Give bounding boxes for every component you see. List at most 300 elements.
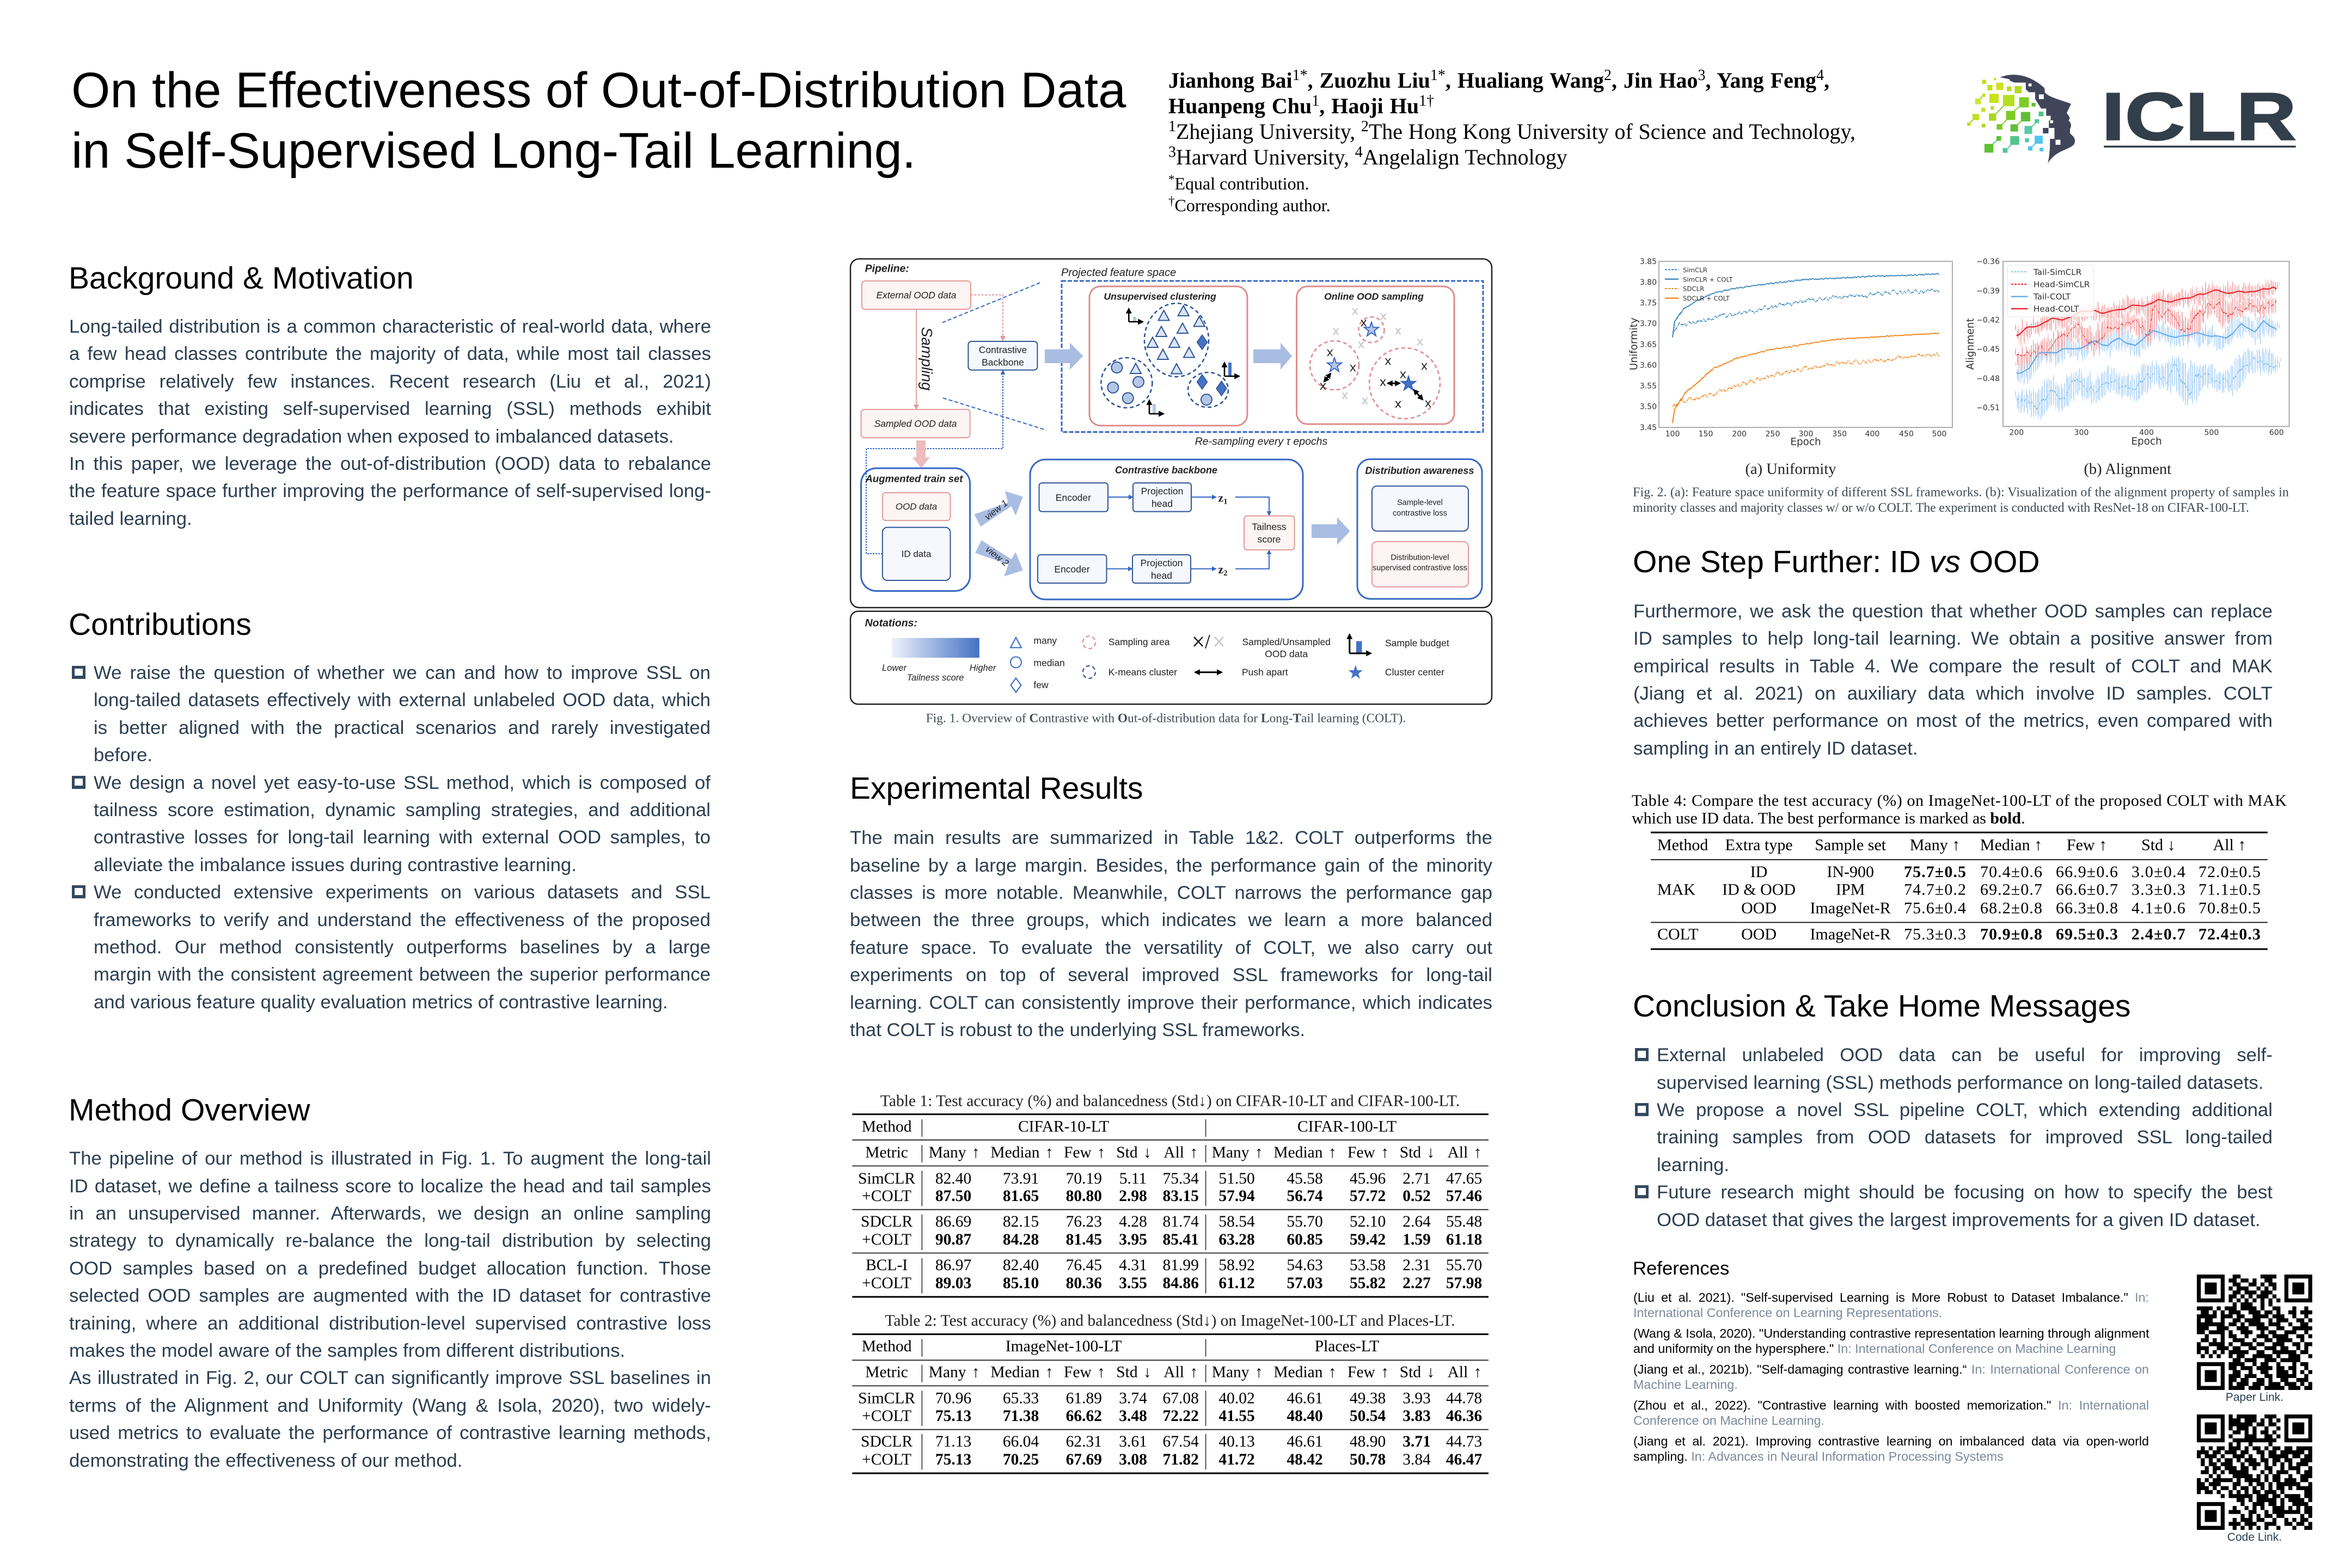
icon: bullet 2 [72,775,85,788]
reference 1: (Liu et al. 2021). "Self-supervised Learning is More Robust to Dataset Imbalance." In: [1633,1290,2149,1304]
panel: online OOD sampling: Online OOD sampling [1324,291,1424,302]
row: OOD: 75.6±0.4 [1904,899,1966,917]
header: Few ↑ [2067,836,2107,854]
y ticks: 3.60 [1640,362,1657,370]
text block: experimental results: learning. COLT can consistently improve their performance, which indicates [850,993,1492,1013]
table 2: +COLT [862,1407,911,1425]
table 1: 89.03 [935,1275,971,1292]
rows: 3.93 [1402,1389,1431,1407]
table 2: 66.62 [1066,1407,1102,1425]
icon: conclusion bullet 3 [1635,1185,1649,1198]
text block: conclusion list: OOD dataset that gives the largest improvements for a given ID dataset. [1657,1210,2261,1230]
authors and affiliations: 3Harvard University, 4Angelalign Technology [1168,144,1567,169]
authors and affiliations: Jianhong Bai1*, Zuozhu Liu1*, Hualiang Wang2, Jin Hao3, Yang Feng4, [1168,67,1829,93]
panel: contrastive backbone: Encoder [1054,564,1090,575]
caption: figure 2 [1633,486,2289,515]
panel: distribution awareness [1357,459,1482,599]
table 2: SDCLR [861,1433,912,1450]
row: ID: ID [1750,863,1767,881]
panel: unsupervised clustering: Unsupervised clustering [1104,291,1216,302]
legend: cluster center: Cluster center [1385,667,1444,678]
x ticks: 250 [1766,430,1780,439]
reference 3 [1633,1362,2149,1392]
subcaptions: figure 2: (b) Alignment [2084,461,2171,478]
table 2: 3.71 [1402,1433,1431,1450]
table 1: 1.59 [1402,1231,1431,1248]
table 1: 3.55 [1119,1275,1147,1292]
reference 4: (Zhou et al., 2022). "Contrastive learning with boosted memorization." In: International [1633,1398,2149,1412]
metric row: All ↑ [1163,1363,1198,1381]
icon: bullet 3 [72,885,85,898]
y ticks: −0.45 [1976,345,2000,354]
x ticks: 200 [2009,428,2024,437]
table 1: 76.23 [1066,1213,1102,1230]
table 1: 2.98 [1119,1187,1147,1205]
legend: shapes: few [1033,679,1049,690]
row: ID and OOD: 71.1±0.5 [2198,880,2261,898]
row: COLT [1657,926,2261,944]
caption: Table 1: Test accuracy (%) and balancedness (Std↓) on CIFAR-10-LT and CIFAR-100-LT. [880,1092,1460,1110]
reference 5: sampling. In: Advances in Neural Information Processing Systems [1633,1449,2004,1463]
table 1 [852,1092,1489,1297]
table 1: 57.94 [1218,1187,1255,1205]
arrow: view 1 [974,491,1023,526]
table 1: 55.48 [1446,1213,1482,1230]
row: OOD: 4.1±0.6 [2132,899,2185,917]
panel: augmented train set: Augmented train set [865,473,963,485]
text block: method overview: makes the model aware of the samples from different distributions. [69,1340,625,1361]
rows: 44.78 [1446,1389,1482,1407]
row: ID and OOD: IPM [1836,880,1865,898]
table 1: 57.46 [1446,1187,1482,1205]
legend: sampled marks [1194,635,1331,659]
legend: shapes [1010,635,1065,693]
text block: contributions list: contrastive losses for long-tail learning with external OOD samples, to [94,827,710,848]
row: OOD: ImageNet-R [1810,899,1891,917]
text block: contributions list: alleviate the imbalance issues during contrastive learning. [94,855,577,875]
text block: contributions list: frameworks to verify and understand the effectiveness of the proposed [94,910,710,930]
reference 3: (Jiang et al., 2021b). "Self-damaging contrastive learning.“ In: International Conference on [1633,1362,2149,1376]
rows [858,1389,1482,1407]
heading: Background & Motivation: Background & Motivation [69,261,414,296]
x ticks: 300 [1799,430,1813,439]
y ticks: 3.70 [1640,320,1657,328]
table 2: 46.36 [1446,1407,1482,1425]
y ticks: 3.80 [1640,278,1657,287]
table 1: 57.98 [1446,1275,1482,1292]
text block: contributions list: margin with the consistent agreement between the superior performance [94,964,710,985]
table 2: +COLT [862,1451,911,1468]
table 1: 59.42 [1350,1231,1386,1248]
rows: SimCLR [858,1389,915,1407]
text block: method overview [69,1148,711,1471]
legend: SDCLR + COLT [1683,295,1730,302]
caption: Table 4: Compare the test accuracy (%) on ImageNet-100-LT of the proposed COLT with MAK [1632,792,2287,810]
row: COLT: OOD [1741,926,1777,944]
title: in Self-Supervised Long-Tail Learning. [71,123,916,179]
rows: 45.58 [1287,1170,1323,1187]
icon: conclusion bullet 2 [1635,1103,1649,1116]
header: Method [862,1118,912,1136]
table 1: 61.12 [1218,1275,1255,1292]
reference 5: (Jiang et al. 2021). Improving contrastive learning on imbalanced data via open-world [1633,1434,2149,1448]
x ticks: 350 [1832,430,1847,439]
table 1: 2.27 [1402,1275,1431,1292]
rows: 5.11 [1119,1170,1147,1187]
panel: augmented train set [861,468,970,591]
metric row: Few ↑ [1347,1363,1389,1381]
reference 4: Conference on Machine Learning. [1633,1413,1824,1428]
x ticks [1665,430,1946,439]
panel: contrastive backbone: z [1218,562,1223,576]
rows: 49.38 [1350,1389,1386,1407]
text block: conclusion list: supervised learning (SSL) methods performance on long-tailed datasets. [1657,1073,2263,1093]
table 2: 48.40 [1287,1407,1323,1425]
arrow: clustering to sampling [1253,342,1292,370]
row: ID and OOD: ID & OOD [1722,880,1796,898]
table 2: 71.38 [1003,1407,1039,1425]
arrow: sampled to train set [912,440,930,468]
chart: uniformity [1628,258,1952,448]
legend: shapes: many [1033,635,1057,646]
text block: contributions list: tailness score estimation, dynamic sampling strategies, and additional [94,800,710,820]
metric row: Few ↑ [1064,1363,1105,1381]
axis labels: Alignment [1965,318,1976,370]
text block: method overview: OOD samples based on a predefined budget allocation function. Those [69,1258,711,1279]
text block: method overview: used metrics to evaluate the performance of contrastive learning methods, [69,1423,711,1443]
legend: areas: K-means cluster [1108,667,1177,678]
row: COLT: 72.4±0.3 [2198,926,2261,944]
x ticks: 100 [1665,430,1680,439]
table 1: 58.92 [1218,1257,1255,1274]
table 2: 3.48 [1119,1407,1147,1425]
panel: contrastive backbone: Contrastive backbone [1115,464,1217,475]
table 1: 63.28 [1218,1231,1255,1248]
table 2 [852,1312,1489,1473]
reference 2 [1633,1326,2149,1356]
curves [1673,274,1939,423]
x ticks [2009,428,2284,437]
label: code link: Code Link. [2227,1531,2282,1543]
text block: background: comprise relatively few instances. Recent research (Liu et al., 2021) [69,371,711,392]
author notes [1168,173,1331,215]
table 1: 86.69 [935,1213,971,1230]
arrow: view 2: view 2 [984,544,1011,568]
axis labels [1628,317,1821,448]
reference 3: Machine Learning. [1633,1377,1738,1392]
axis labels [1965,318,2162,448]
text block: experimental results: baseline by a large margin. Besides, the performance gain of the minority [850,855,1492,876]
legend [2007,265,2094,317]
metric row [865,1144,1481,1161]
table 2: 46.47 [1446,1451,1482,1468]
text block: method overview: demonstrating the effectiveness of our method. [69,1450,462,1471]
table 4 [1632,792,2287,949]
legend: Tail-SimCLR [2033,267,2082,277]
row: COLT: COLT [1657,926,1699,944]
metric row: Median ↑ [990,1363,1054,1381]
text block: one step further: sampling in an entirely ID dataset. [1633,738,1918,759]
table 1: 83.15 [1163,1187,1199,1205]
table 1: BCL-I [866,1257,908,1274]
table 1: 84.86 [1163,1275,1199,1292]
icon: paper QR code [2197,1275,2312,1390]
panel: contrastive backbone: z [1218,491,1223,505]
text block: method overview: selected OOD samples are augmented with the ID dataset for contrastive [69,1285,711,1306]
legend: sampled marks: Sampled/Unsampled [1242,636,1331,647]
text block: contributions list: method. Our method consistently outperforms baselines by a large [94,937,710,958]
authors and affiliations: 1Zhejiang University, 2The Hong Kong University of Science and Technology, [1168,118,1855,144]
metric row: Std ↓ [1116,1363,1152,1381]
rows: 40.02 [1218,1389,1255,1407]
figure 1: notations panel: Notations: [865,617,917,629]
table 2: 3.84 [1402,1451,1431,1468]
table 1: 80.80 [1066,1187,1102,1205]
box: external OOD data [862,281,971,309]
row: OOD: 66.3±0.8 [2056,899,2118,917]
x ticks: 500 [2204,428,2219,437]
table 1: 55.70 [1446,1257,1482,1274]
x ticks: 400 [1865,430,1879,439]
header: Many ↑ [1910,836,1960,854]
rows: 46.61 [1287,1389,1323,1407]
text block: experimental results: between the three groups, which indicates we learn a more balanced [850,910,1492,930]
icon: code QR code [2197,1414,2312,1530]
heading: Method Overview: Method Overview [69,1092,310,1127]
panel: contrastive backbone: Projection [1141,558,1183,568]
box: sampled OOD data: Sampled OOD data [874,418,957,429]
table 2: 71.82 [1163,1451,1199,1468]
legend: tailness gradient: Tailness score [907,673,964,683]
legend: Tail-COLT [2033,292,2071,302]
table 1: 3.95 [1119,1231,1147,1248]
table 2: 75.13 [935,1451,971,1468]
text block: contributions list: We raise the question of whether we can and how to improve SSL on [94,663,710,683]
metric row [865,1363,1481,1381]
legend: sample budget: Sample budget [1385,638,1449,648]
table 1: 61.18 [1446,1231,1482,1248]
box: contrastive backbone: Contrastive [979,344,1027,355]
label: pipeline: Pipeline: [865,263,909,275]
caption [1632,792,2287,828]
panel: online OOD sampling [1297,286,1454,424]
table 1: 85.10 [1003,1275,1039,1292]
x ticks: 400 [2139,428,2154,437]
rows: 2.71 [1402,1170,1431,1187]
rows: 61.89 [1066,1389,1102,1407]
row: ID and OOD [1657,880,2261,898]
table 1: 81.74 [1163,1213,1199,1230]
table 1: 80.36 [1066,1275,1102,1292]
icon: head and pixels [1967,75,2075,163]
table 1: 57.72 [1350,1187,1386,1205]
y ticks: 3.65 [1640,341,1657,350]
dashed feature space box [1062,281,1483,432]
row: ID and OOD: MAK [1657,880,1695,898]
rows: 65.33 [1003,1389,1039,1407]
subcaptions: figure 2: (a) Uniformity [1745,461,1836,478]
table 2: 46.61 [1287,1433,1323,1450]
metric row: All ↑ [1448,1363,1481,1381]
heading: References: References [1633,1258,1729,1278]
logo: ICLR [1967,75,2296,163]
header: Median ↑ [1980,836,2042,854]
panel: distribution awareness: contrastive loss [1393,509,1447,518]
panel: augmented train set: ID data [902,549,932,559]
legend: push apart: Push apart [1242,667,1288,678]
header: Std ↓ [2141,836,2176,854]
legend: Head-SimCLR [2033,280,2090,290]
table 2: 72.22 [1163,1407,1199,1425]
heading: Contributions: Contributions [69,607,252,641]
figure 1: notations panel [850,611,1492,704]
x ticks: 150 [1699,430,1713,439]
text block: background: tailed learning. [69,509,192,529]
legend: sample budget [1350,634,1449,653]
table 2: 62.31 [1066,1433,1102,1450]
text block: conclusion list: training samples from OOD datasets for improved SSL long-tailed [1657,1127,2273,1148]
row: ID and OOD: 66.6±0.7 [2056,880,2118,898]
text block: conclusion list [1657,1045,2273,1230]
text block: method overview: As illustrated in Fig. 2, our COLT can significantly improve SSL baselines in [69,1368,711,1388]
row: OOD: 70.8±0.5 [2198,899,2261,917]
text block: method overview: in an unsupervised manner. Afterwards, we design an online sampling [69,1203,711,1224]
legend: tailness gradient [882,638,997,683]
header: Extra type [1725,836,1793,854]
legend: areas [1083,636,1177,678]
text block: conclusion list: External unlabeled OOD data can be useful for improving self- [1657,1045,2273,1065]
label: sampling: Sampling [918,327,935,391]
y ticks: −0.48 [1976,375,2000,383]
legend: areas: Sampling area [1108,636,1170,647]
y ticks: −0.51 [1976,404,2000,413]
row: ID: 72.0±0.5 [2198,863,2261,881]
text block: background: In this paper, we leverage the out-of-distribution (OOD) data to rebalance [69,454,711,474]
text block: contributions list: is better aligned with the practical scenarios and rarely investigated [94,718,710,738]
legend: SimCLR + COLT [1683,275,1733,283]
text block: conclusion list: learning. [1657,1155,1729,1175]
box: contrastive backbone [968,341,1037,370]
metric row: Few ↑ [1064,1144,1105,1161]
metric row: Many ↑ [1212,1363,1263,1381]
row: OOD [1741,899,2261,917]
table 1: 90.87 [935,1231,971,1248]
text block: experimental results: experiments on top of several improved SSL frameworks for long-tail [850,965,1492,985]
text block: one step further: empirical results in Table 4. We compare the result of COLT and MAK [1633,656,2273,677]
chart: alignment [1965,258,2289,448]
text block: background: the feature space further improving the performance of self-supervised long- [69,481,711,501]
label: projected feature space: Projected feature space [1061,267,1176,279]
legend: cluster center [1348,665,1444,679]
arrow: ID data to backbone [866,370,1003,554]
metric row: Many ↑ [929,1144,980,1161]
table 1: 82.15 [1003,1213,1039,1230]
y ticks: 3.55 [1640,382,1657,391]
table 1: +COLT [862,1231,911,1248]
row: COLT: ImageNet-R [1810,926,1891,944]
rows: 82.40 [935,1170,971,1187]
panel: augmented train set: OOD data [896,501,937,512]
y ticks: −0.36 [1976,258,2000,266]
table 2: 50.54 [1350,1407,1386,1425]
rows: 67.08 [1163,1389,1199,1407]
logo wordmark: ICLR [2102,79,2296,155]
text block: conclusion list: Future research might should be focusing on how to specify the best [1657,1182,2273,1203]
rows: 73.91 [1003,1170,1039,1187]
text block: background: Long-tailed distribution is a common characteristic of real-world data, where [69,316,711,337]
panel: contrastive backbone: Projection [1141,486,1183,497]
panel: contrastive backbone: 2 [1223,569,1228,578]
subcaptions: figure 2 [1745,461,2171,478]
panel: distribution awareness: Distribution-level [1391,554,1449,562]
caption: Table 2: Test accuracy (%) and balancedness (Std↓) on ImageNet-100-LT and Places-LT. [885,1312,1455,1330]
reference 5 [1633,1434,2149,1463]
box: contrastive backbone: Backbone [982,357,1024,368]
header: Places-LT [1315,1338,1379,1355]
table 1: 0.52 [1402,1187,1431,1205]
caption: figure 1: Fig. 1. Overview of Contrastive with Out-of-distribution data for Long-Tail learning (COLT). [926,711,1406,725]
icon: bullet 1 [72,666,85,679]
author notes: *Equal contribution. [1168,173,1309,193]
figure 1: pipeline panel [850,259,1492,608]
y ticks: 3.75 [1640,299,1657,308]
table 1: 4.31 [1119,1257,1147,1274]
curves [2017,287,2276,408]
text block: one step further [1633,601,2273,759]
panel: contrastive backbone: head [1152,498,1173,509]
title: On the Effectiveness of Out-of-Distribution Data [71,63,1126,118]
legend: Head-COLT [2033,304,2079,314]
arrow: external to backbone [971,295,1003,341]
row: ID: 66.9±0.6 [2056,863,2118,881]
axis labels: Epoch [2131,436,2162,448]
metric row: Median ↑ [1273,1144,1337,1161]
label: paper link: Paper Link. [2226,1391,2283,1404]
table 1: 56.74 [1287,1187,1323,1205]
legend: SimCLR [1683,266,1707,274]
projection lines [942,283,1046,430]
table 2: 3.83 [1402,1407,1431,1425]
text block: contributions list [94,663,711,1013]
table 2: 71.13 [935,1433,971,1450]
text block: one step further: ID samples to help long-tail learning. We obtain a positive answer from [1633,628,2273,649]
arrow: view 2 [975,540,1023,577]
rows: 51.50 [1218,1170,1255,1187]
table 1: 81.65 [1003,1187,1039,1205]
author notes: †Corresponding author. [1168,194,1331,215]
axis labels: Epoch [1790,436,1821,448]
table 1: 58.54 [1218,1213,1255,1230]
header: All ↑ [2213,836,2246,854]
table 1: 87.50 [935,1187,971,1205]
table 2: 50.78 [1350,1451,1386,1468]
y ticks: 3.50 [1640,403,1657,412]
label: re-sampling: Re-sampling every τ epochs [1195,436,1328,448]
text block: method overview: ID dataset, we define a tailness score to localize the head and tail samples [69,1176,711,1197]
legend: sampled marks: OOD data [1265,648,1308,659]
x ticks: 300 [2074,428,2088,437]
table 1: +COLT [862,1275,911,1292]
heading: Experimental Results: Experimental Results [850,771,1143,806]
metric row: Median ↑ [1273,1363,1337,1381]
header: Method [1657,836,1708,854]
rows: 75.34 [1163,1170,1199,1187]
arrow: sampling [916,309,917,409]
table 1: 86.97 [935,1257,971,1274]
text block: one step further: achieves better performance on most of the metrics, even compared with [1633,710,2273,731]
text block: experimental results [850,828,1492,1040]
panel: contrastive backbone: score [1258,534,1281,544]
